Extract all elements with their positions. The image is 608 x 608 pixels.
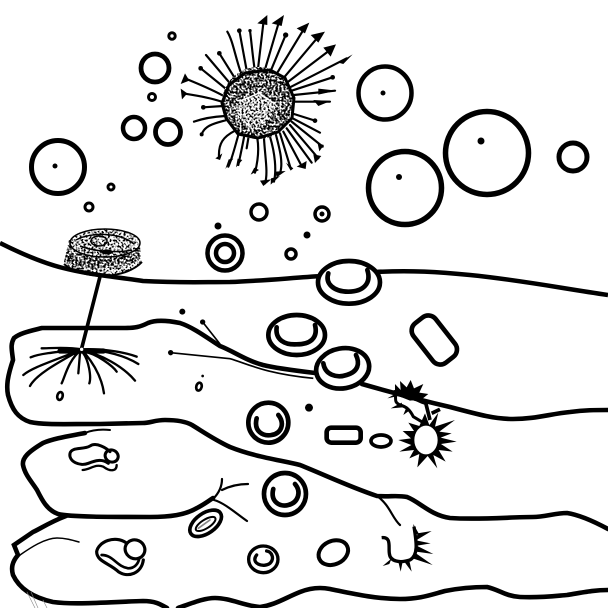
spiky cells bbox=[315, 380, 457, 572]
organelle one bbox=[70, 445, 120, 470]
oval bottom bbox=[315, 536, 352, 570]
large ring cell bbox=[264, 473, 306, 515]
ring cell bbox=[248, 403, 288, 443]
lens-shaped organism on membrane bbox=[64, 229, 142, 276]
small capsule bbox=[327, 428, 361, 443]
central vesicles and spiked cell bbox=[248, 261, 461, 447]
rounded capsule bbox=[408, 312, 461, 368]
upper spiky cell bbox=[387, 380, 440, 422]
organelle two bbox=[97, 537, 148, 575]
tubular body outlines bbox=[7, 321, 608, 608]
membrane-bound cell bbox=[318, 261, 380, 304]
round spiky cell bbox=[398, 413, 457, 468]
lower spiky cell bbox=[382, 524, 433, 572]
upper membrane line bbox=[0, 243, 608, 295]
oval cell bbox=[185, 505, 226, 542]
oval bbox=[371, 435, 391, 447]
cell two bbox=[268, 315, 325, 355]
dot bbox=[305, 404, 313, 412]
dots and channel lines bbox=[56, 309, 313, 401]
spiked sphere with arrows bbox=[181, 15, 353, 186]
root filament bbox=[23, 277, 138, 393]
small ring cell bbox=[249, 546, 278, 573]
cell three bbox=[313, 344, 372, 393]
lower vesicles and organelles bbox=[70, 445, 306, 575]
floating vesicles bbox=[32, 33, 587, 270]
